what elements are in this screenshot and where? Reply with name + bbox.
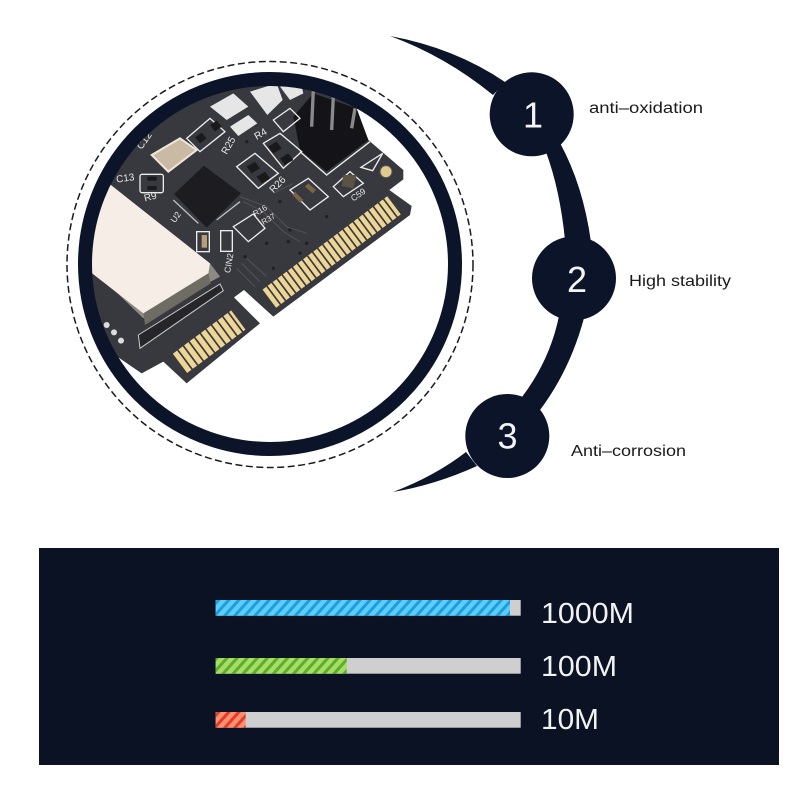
curved timeline — [390, 36, 616, 492]
vias — [243, 140, 328, 270]
photo: network card circuit board — [73, 73, 412, 383]
step 1 badge — [490, 72, 574, 156]
connector pads at lower left — [104, 322, 124, 344]
label: anti-corrosion: Anti–corrosion — [571, 443, 686, 460]
label: 10M: 10M — [541, 704, 599, 736]
panel: product lens — [67, 62, 473, 468]
step 3 badge — [465, 394, 549, 478]
board silkscreen labels: CIN2 — [222, 252, 235, 274]
board silkscreen labels: R4 — [253, 126, 270, 143]
label: high stability: High stability — [629, 273, 731, 290]
small parts — [147, 121, 357, 248]
step 2 badge: 2 — [567, 259, 587, 300]
board silkscreen labels: R9 — [143, 191, 159, 205]
board silkscreen labels: R25 — [220, 135, 239, 156]
white pads — [210, 86, 304, 136]
gold fingers: small connector — [180, 320, 238, 363]
pin header — [293, 93, 368, 172]
step 1 badge: 1 — [523, 94, 543, 136]
board silkscreen labels: U2 — [168, 210, 183, 224]
board silkscreen labels: C59 — [349, 186, 368, 203]
bar: 10M — [216, 712, 521, 728]
board silkscreen labels: R37 — [260, 211, 278, 227]
board silkscreen labels — [116, 126, 368, 274]
board body — [73, 73, 412, 383]
arc segments — [390, 36, 505, 95]
label: 100M: 100M — [541, 651, 617, 683]
triangle marking — [361, 153, 383, 171]
metal shield — [116, 260, 220, 318]
board silkscreen labels: R26 — [268, 174, 289, 195]
step 2 badge — [532, 236, 616, 320]
board silkscreen labels: R16 — [251, 203, 269, 218]
bar: 1000M — [216, 600, 521, 616]
bar: 100M — [216, 658, 521, 674]
dashed ring — [67, 62, 473, 468]
copper traces — [237, 183, 307, 287]
label: anti-oxidation: anti–oxidation — [589, 100, 703, 117]
board silkscreen labels: C12 — [135, 130, 155, 152]
step 3 badge: 3 — [497, 416, 518, 456]
label: 1000M: 1000M — [541, 598, 634, 630]
component outlines — [140, 108, 363, 252]
crystal oscillator — [152, 138, 197, 172]
controller chip — [173, 200, 240, 224]
navy ring — [85, 79, 455, 449]
mounting pad — [380, 166, 392, 178]
panel: speed comparison — [39, 548, 779, 765]
gold fingers: large connector — [269, 205, 394, 299]
board silkscreen labels: C13 — [116, 172, 136, 186]
